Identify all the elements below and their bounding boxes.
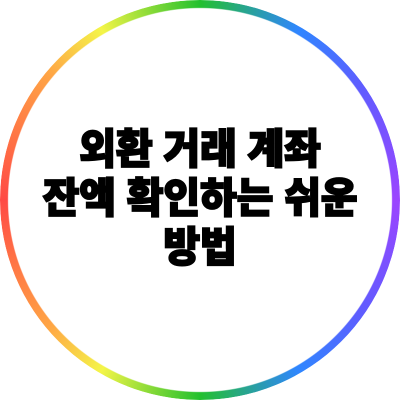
title [42,127,357,271]
title: 잔액 확인하는 쉬운 [43,176,357,222]
title: 방법 [163,225,237,271]
title: 외환 거래 계좌 [79,127,321,173]
